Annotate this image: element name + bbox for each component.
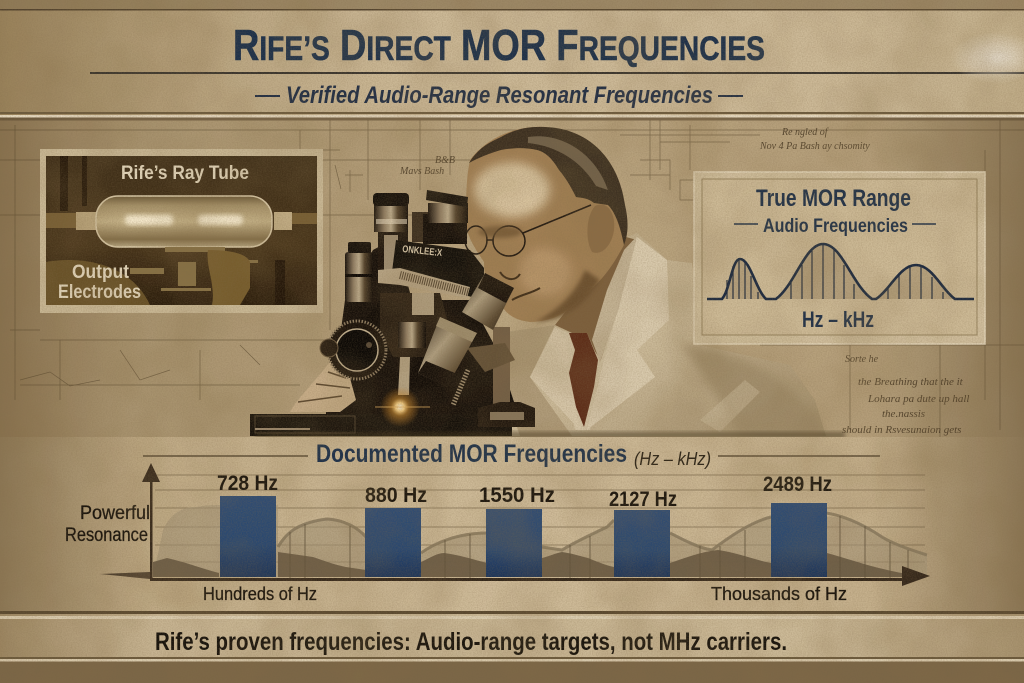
section heading: Documented MOR Frequencies	[316, 440, 627, 468]
takeaway sentence: Rife’s proven frequencies: Audio-range targets, not MHz carriers.	[155, 628, 787, 656]
hair	[469, 127, 628, 245]
lower objective	[418, 317, 477, 387]
base plate	[250, 414, 512, 436]
center body	[380, 293, 450, 357]
center column	[398, 357, 410, 395]
forehead highlight	[474, 163, 550, 217]
knurled ring	[378, 268, 470, 298]
handwritten notes: Re ngled of	[781, 127, 829, 138]
shirt collar	[555, 237, 637, 430]
base knob	[478, 402, 535, 427]
section heading: (Hz – kHz)	[634, 449, 711, 469]
eyepiece tube A	[373, 193, 409, 278]
panel card	[694, 172, 985, 344]
x axis labels: Thousands of Hz	[711, 584, 847, 604]
light glow	[375, 387, 430, 427]
y axis label: Powerful	[80, 503, 150, 524]
shadow under portrait	[255, 432, 845, 438]
grid lines	[155, 475, 925, 562]
bar value labels: 2127 Hz	[609, 488, 677, 511]
scientist portrait	[465, 127, 826, 436]
banner plate	[0, 612, 1024, 660]
jaw shading	[535, 270, 600, 322]
background sketches and blueprint lines	[0, 120, 1024, 440]
photo background	[46, 156, 317, 305]
chart axes with arrows	[100, 463, 930, 586]
handwritten notes: Nov 4 Pa Bash ay chsomity	[759, 141, 870, 152]
frequency chart section	[65, 440, 930, 604]
darker background pipes	[60, 156, 285, 305]
microscope	[250, 190, 535, 436]
left lapel	[530, 327, 580, 430]
side objective	[345, 242, 373, 302]
lower left shape	[46, 260, 150, 305]
panel axis label: Hz – kHz	[802, 307, 874, 332]
y axis label: Resonance	[65, 525, 148, 546]
handwritten notes: Sorte he	[845, 354, 879, 365]
blue bars	[220, 496, 827, 577]
tube stand	[130, 247, 258, 291]
dark foreground hills	[153, 550, 927, 577]
spectrum tick lines	[290, 516, 908, 578]
x axis labels	[203, 584, 847, 604]
main title: RIFE’S DIRECT MOR FREQUENCIES	[233, 21, 765, 70]
bar value labels: 880 Hz	[365, 484, 427, 507]
bottom banner	[0, 611, 1024, 683]
label text on microscope: ONKLEE:X	[402, 244, 443, 259]
Output Electrodes label	[58, 262, 141, 303]
lower chart band background	[0, 437, 1024, 612]
bar value labels: 728 Hz	[217, 472, 278, 495]
hand on focus wheel	[290, 362, 356, 412]
handwritten notes: the.nassis	[882, 408, 925, 420]
light glare	[950, 32, 1024, 84]
handwritten notes: foomy peione nilts	[870, 462, 951, 474]
lab coat	[498, 233, 826, 436]
connecting pipes	[46, 213, 317, 228]
dark connector behind tubes	[335, 238, 412, 375]
y axis label	[65, 503, 150, 546]
panel subheading: Audio Frequencies	[763, 216, 908, 237]
head	[466, 127, 627, 322]
necktie	[569, 333, 598, 427]
coil spring	[453, 370, 468, 405]
top banner	[0, 0, 1024, 120]
rear eyepiece	[412, 212, 428, 242]
handwritten notes: should in Rsvesunaion gets	[842, 424, 961, 436]
hand in photo	[207, 250, 250, 305]
photo frame	[40, 149, 323, 313]
focus wheel	[320, 321, 386, 379]
bar value labels	[217, 472, 832, 511]
section heading	[143, 440, 880, 469]
nose and mouth lines	[500, 272, 540, 300]
x axis labels: Hundreds of Hz	[203, 584, 317, 604]
eye lens tube	[462, 273, 514, 330]
eyeglasses	[465, 205, 591, 256]
handwritten notes	[399, 127, 975, 474]
panel heading: True MOR Range	[756, 185, 911, 212]
eyepiece tube B	[423, 190, 468, 244]
handwritten notes: Mavs Bash	[399, 166, 444, 177]
glowing filament	[125, 215, 243, 225]
resonance curve chart	[707, 244, 974, 299]
bar value labels: 1550 Hz	[479, 484, 555, 507]
hill outline band	[278, 513, 927, 555]
stand bracket	[467, 343, 515, 372]
handwritten notes: B&B	[435, 155, 455, 166]
faint background resonance hills	[153, 505, 927, 577]
neck	[555, 237, 637, 363]
cheek highlight	[519, 248, 571, 296]
right panel: true MOR range	[694, 172, 985, 344]
bar value labels: 2489 Hz	[763, 473, 832, 496]
coat sleeve highlight	[700, 380, 760, 432]
subtitle: Verified Audio-Range Resonant Frequencies	[286, 82, 713, 109]
stand column	[493, 327, 510, 405]
banner plate	[0, 0, 1024, 116]
left photo panel: ray tube	[40, 149, 323, 313]
dark mass under the body	[326, 300, 515, 428]
right lapel	[587, 237, 669, 430]
handwritten notes: Lohara pa dute up hall	[867, 393, 969, 405]
handwritten notes: Sketch meliate yan	[892, 442, 975, 454]
ear	[587, 204, 614, 253]
Rife's Ray Tube label: Rife’s Ray Tube	[121, 163, 249, 184]
handwritten notes: the Breathing that the it	[858, 376, 964, 388]
brow and eye shadow	[478, 226, 522, 238]
Output Electrodes label: Output	[72, 262, 130, 283]
Output Electrodes label: Electrodes	[58, 282, 141, 303]
labelled body block	[392, 240, 484, 300]
ray tube glass	[96, 196, 272, 247]
